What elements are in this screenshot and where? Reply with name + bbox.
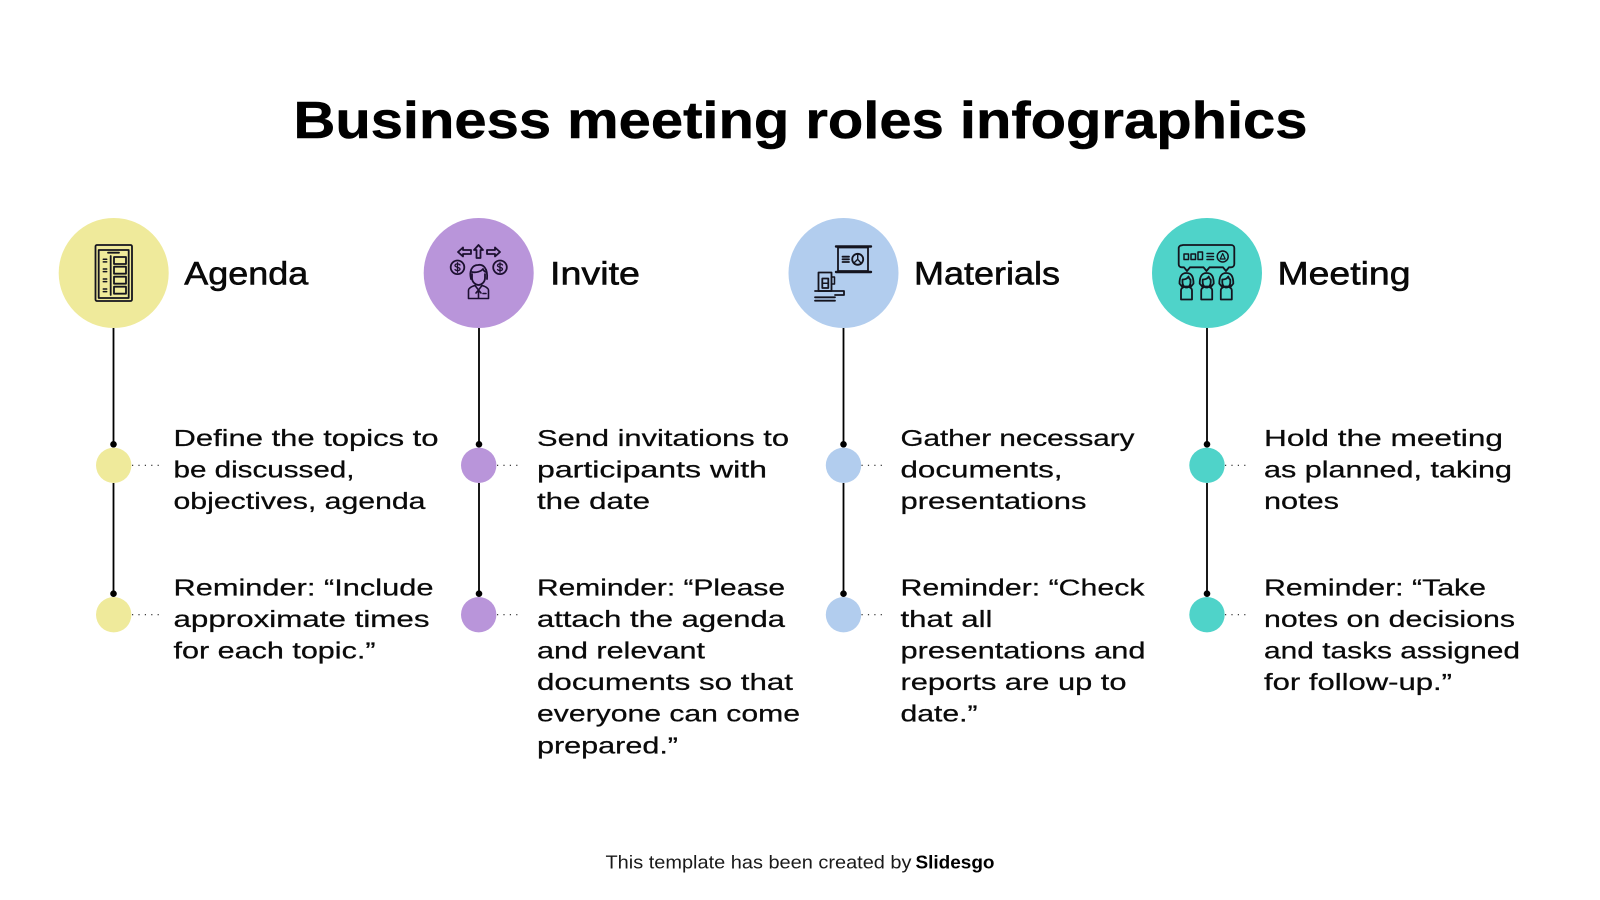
icon: presentation screen and device [815, 246, 871, 301]
text: description: as planned, taking [1264, 456, 1512, 482]
panel: materials [788, 218, 1146, 727]
icon: person with arrows and money [451, 245, 507, 298]
text: reminder: date.” [900, 701, 978, 727]
text: definition [174, 425, 438, 514]
header circle [59, 218, 169, 328]
step marker 2 [461, 597, 519, 632]
text: description: the date [537, 488, 650, 514]
step marker 2 [96, 597, 160, 632]
text: description: participants with [537, 456, 767, 482]
text: reminder: reports are up to [900, 669, 1126, 695]
step marker 1 [826, 448, 884, 483]
text: reminder: Reminder: “Include [174, 574, 434, 600]
text: reminder [1264, 574, 1520, 695]
footer credit: Slidesgo [916, 852, 995, 872]
text: reminder [537, 574, 800, 758]
text: description: notes [1264, 488, 1339, 514]
icon: agenda checklist [96, 245, 132, 301]
text: reminder: Reminder: “Take [1264, 574, 1486, 600]
step marker 2 [826, 597, 884, 632]
text: description: Hold the meeting [1264, 425, 1503, 451]
heading: meeting: Meeting [1278, 255, 1410, 291]
header circle [1152, 218, 1262, 328]
text: reminder: attach the agenda [537, 606, 786, 632]
title: Business meeting roles infographics [294, 92, 1308, 150]
step marker 2 [1189, 597, 1247, 632]
text: description: Send invitations to [537, 425, 789, 451]
text: reminder: Reminder: “Please [537, 574, 785, 600]
text: reminder [174, 574, 434, 664]
step marker 1 [1189, 448, 1247, 483]
heading: materials: Materials [914, 255, 1060, 291]
text: description [537, 425, 789, 514]
header circle [788, 218, 898, 328]
text: reminder: approximate times [174, 606, 430, 632]
text: reminder: everyone can come [537, 701, 800, 727]
text: definition: be discussed, [174, 456, 354, 482]
text: reminder: for follow-up.” [1264, 669, 1452, 695]
text: reminder: for each topic.” [174, 638, 376, 664]
text: reminder: and tasks assigned [1264, 638, 1520, 664]
panel: meeting [1152, 218, 1520, 695]
text: reminder: presentations and [900, 638, 1146, 664]
step marker 1 [96, 448, 160, 483]
text: definition: objectives, agenda [174, 488, 427, 514]
step marker 1 [461, 448, 519, 483]
text: description: presentations [900, 488, 1086, 514]
text: reminder [900, 574, 1146, 727]
text: reminder: that all [900, 606, 992, 632]
heading: agenda: Agenda [184, 255, 309, 291]
connector lines [476, 328, 482, 597]
panel: invite [424, 218, 800, 758]
text: description: documents, [900, 456, 1062, 482]
text: description [900, 425, 1135, 514]
text: reminder: Reminder: “Check [900, 574, 1145, 600]
connector lines [110, 328, 117, 597]
text: reminder: notes on decisions [1264, 606, 1515, 632]
text: definition: Define the topics to [174, 425, 438, 451]
icon: team with speech bubble [1179, 245, 1234, 300]
text: description: Gather necessary [900, 425, 1135, 451]
text: reminder: and relevant [537, 638, 706, 664]
footer credit: This template has been created by [606, 852, 912, 872]
connector lines [840, 328, 847, 597]
text: reminder: prepared.” [537, 732, 678, 758]
heading: invite: Invite [550, 255, 640, 291]
header circle [424, 218, 534, 328]
text: reminder: documents so that [537, 669, 794, 695]
panel: agenda [59, 218, 438, 664]
connector lines [1204, 328, 1210, 597]
text: description [1264, 425, 1512, 514]
